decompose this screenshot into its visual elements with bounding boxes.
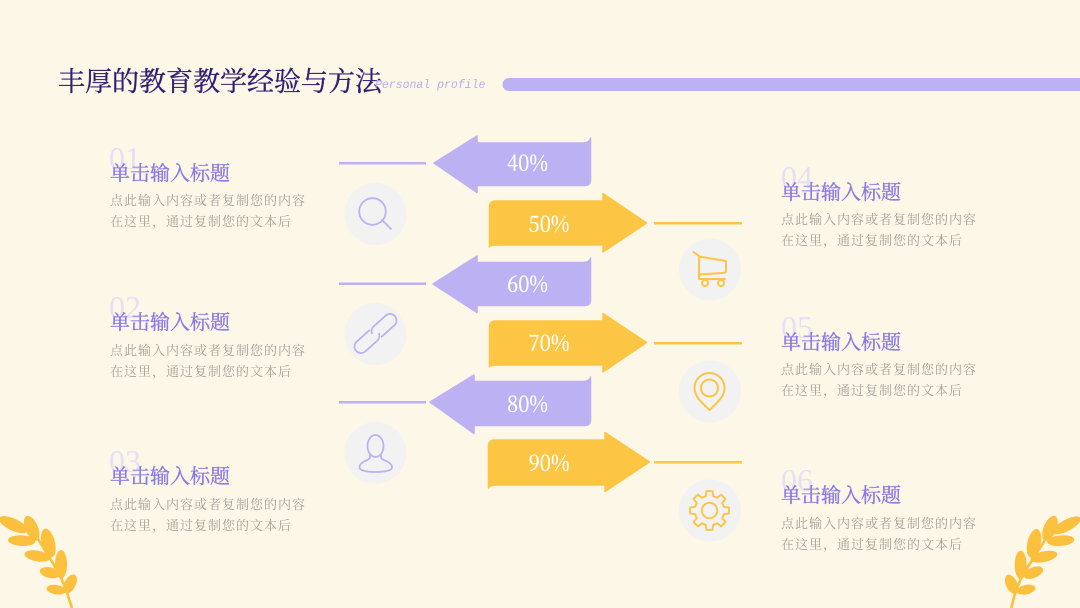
arrow 80%: 80% (507, 388, 548, 418)
text block 04 (781, 159, 977, 249)
text block 02: 在这里，通过复制您的文本后 (110, 361, 292, 380)
text block 01: 单击输入标题 (110, 157, 230, 186)
arrow 50% (490, 194, 646, 252)
arrow 70% (490, 314, 646, 372)
text block 02: 点此输入内容或者复制您的内容 (110, 340, 306, 359)
arrow 80% (430, 375, 590, 434)
title: 丰厚的教育教学经验与方法 (58, 60, 383, 99)
text block 06: 点此输入内容或者复制您的内容 (781, 513, 977, 532)
text block 06 (781, 462, 977, 553)
header bar (502, 78, 1080, 91)
text block 03: 03 (109, 443, 141, 479)
text block 05: 05 (781, 309, 813, 345)
text block 01: 01 (109, 140, 141, 176)
text block 03 (109, 443, 306, 534)
arrow 40% (434, 136, 590, 192)
icon: search (344, 183, 406, 245)
text block 04: 点此输入内容或者复制您的内容 (781, 209, 977, 228)
text block 05: 点此输入内容或者复制您的内容 (781, 359, 977, 378)
text block 01: 在这里，通过复制您的文本后 (110, 211, 292, 230)
text block 06: 在这里，通过复制您的文本后 (781, 534, 963, 553)
text block 05 (781, 309, 977, 399)
text block 04: 04 (781, 159, 813, 195)
arrow 50%: 50% (528, 208, 570, 238)
subtitle: Personal profile (375, 79, 486, 92)
text block 05: 在这里，通过复制您的文本后 (781, 380, 963, 399)
text block 04: 在这里，通过复制您的文本后 (781, 230, 963, 249)
text block 03: 在这里，通过复制您的文本后 (110, 515, 292, 534)
icon: link (344, 303, 406, 365)
text block 02 (109, 289, 306, 380)
arrow 70%: 70% (528, 326, 570, 358)
arrow 90% (488, 432, 650, 492)
icon: gear (679, 480, 741, 542)
text block 04: 单击输入标题 (781, 176, 901, 205)
wheat sprig left (0, 513, 80, 608)
arrow 60% (433, 256, 590, 312)
arrow 40%: 40% (507, 146, 548, 178)
text block 06: 06 (781, 462, 813, 498)
icon: shopping cart (679, 238, 741, 300)
text block 03: 点此输入内容或者复制您的内容 (110, 494, 306, 513)
text block 02: 单击输入标题 (110, 306, 230, 335)
icon: location pin (679, 360, 741, 422)
text block 01 (109, 140, 306, 230)
text block 02: 02 (109, 289, 141, 325)
text block 03: 单击输入标题 (110, 460, 230, 489)
wheat sprig right (1002, 513, 1080, 608)
text block 01: 点此输入内容或者复制您的内容 (110, 190, 306, 209)
text block 06: 单击输入标题 (781, 479, 901, 508)
arrow 60%: 60% (507, 268, 548, 298)
arrow 90%: 90% (528, 446, 570, 478)
icon: user (344, 422, 406, 484)
text block 05: 单击输入标题 (781, 326, 901, 355)
